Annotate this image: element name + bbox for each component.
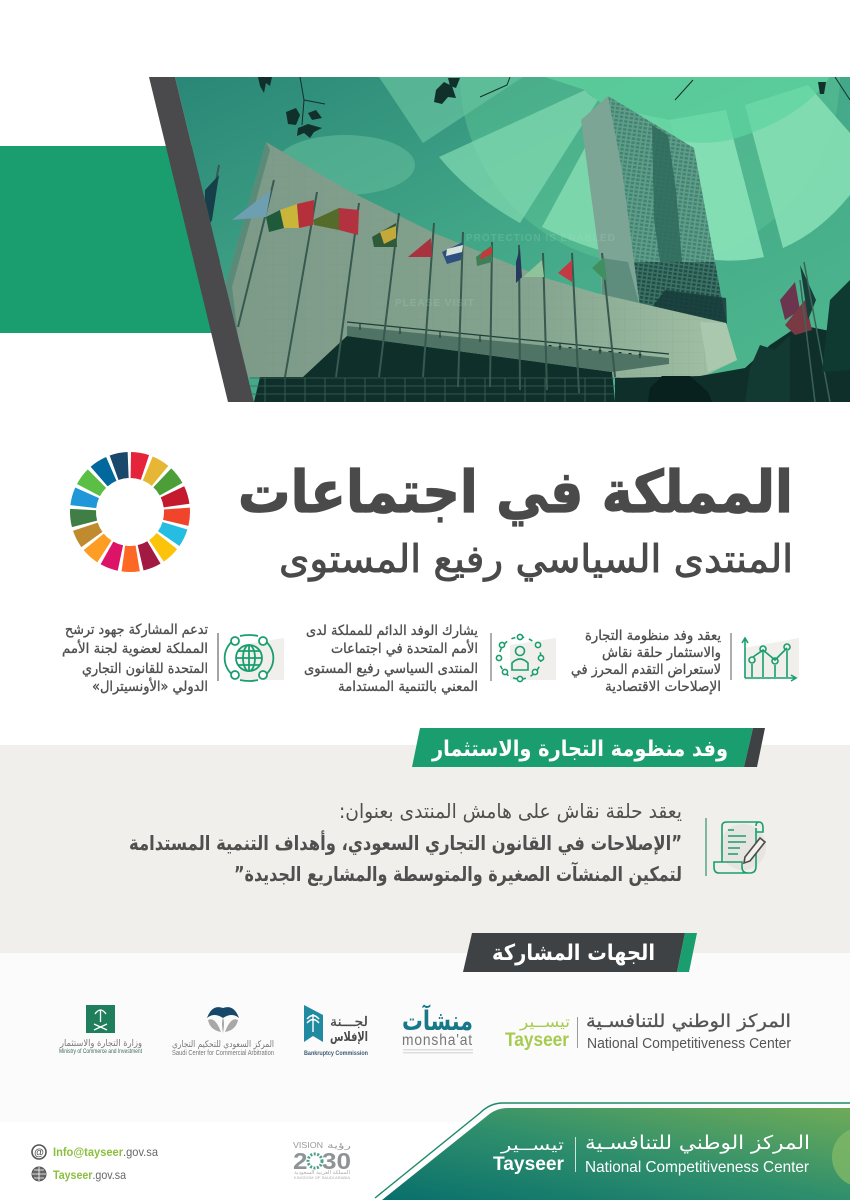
flag poles bbox=[205, 165, 615, 393]
text block: المملكة لعضوية لجنة الأمم bbox=[62, 639, 208, 657]
tree branches bbox=[258, 77, 850, 138]
icon: line chart bbox=[731, 633, 799, 681]
logo: National Competitiveness Center: المركز الوطني للتنافسـية bbox=[586, 1011, 791, 1032]
logo: National Competitiveness Center: تيســير bbox=[519, 1013, 570, 1031]
column: trade delegation bbox=[571, 628, 799, 695]
text block bbox=[62, 622, 208, 695]
logo: Saudi Center for Commercial Arbitration: Saudi Center for Commercial Arbitration bbox=[172, 1050, 274, 1057]
photo watermark: PLEASE VISIT bbox=[395, 298, 475, 309]
lower near-white band bbox=[0, 953, 850, 1122]
logo: Vision 2030: المملكة العربية السعودية bbox=[294, 1170, 350, 1176]
panel: trade delegation band bbox=[0, 728, 850, 953]
text block: الدولي «الأونسيترال» bbox=[92, 677, 208, 695]
logo: Bankruptcy Commission bbox=[304, 1005, 368, 1057]
ribbon: participating entities bbox=[463, 933, 697, 972]
logo: Vision 2030 bbox=[293, 1141, 351, 1180]
text block bbox=[304, 623, 478, 695]
text: panel discussion title: لتمكين المنشآت الصغيرة والمتوسطة والمشاريع الجديدة” bbox=[234, 861, 682, 886]
subtitle: المنتدى السياسي رفيع المستوى bbox=[279, 537, 793, 582]
logo: Vision 2030: KINGDOM OF SAUDI ARABIA bbox=[294, 1175, 350, 1180]
SDG colour wheel bbox=[64, 446, 196, 578]
footer Tayseer wordmark bbox=[493, 1132, 810, 1176]
text: panel discussion title: ”الإصلاحات في القانون التجاري السعودي، وأهداف التنمية المستدامة bbox=[129, 829, 682, 856]
text block: تدعم المشاركة جهود ترشح bbox=[65, 622, 208, 638]
logo: National Competitiveness Center: National Competitiveness Center bbox=[587, 1035, 791, 1052]
text block: لاستعراض التقدم المحرز في bbox=[571, 662, 721, 678]
logo: National Competitiveness Center: Tayseer bbox=[505, 1030, 570, 1051]
text block: والاستثمار حلقة نقاش bbox=[602, 645, 721, 661]
logo: Ministry of Commerce and Investment: Ministry of Commerce and Investment bbox=[59, 1048, 142, 1055]
logo: Ministry of Commerce and Investment: وزارة التجارة والاستثمار bbox=[59, 1039, 142, 1049]
footer green panel bbox=[375, 1103, 850, 1200]
text block: الإصلاحات الاقتصادية bbox=[605, 679, 721, 695]
logo: National Competitiveness Center bbox=[505, 1011, 791, 1052]
wheel overlay wedges bbox=[282, 77, 850, 261]
footer contact: email: @ bbox=[34, 1148, 44, 1158]
logo: Bankruptcy Commission: لجـــنة bbox=[330, 1015, 368, 1030]
canopy and entrance shadow bbox=[254, 322, 669, 402]
text block: المعني بالتنمية المستدامة bbox=[338, 679, 478, 695]
column: UNCITRAL candidacy bbox=[62, 622, 284, 695]
logo: Bankruptcy Commission: الإفلاس bbox=[330, 1030, 368, 1045]
flags bbox=[204, 175, 607, 283]
photo watermark: PROTECTION IS ENABLED bbox=[466, 233, 616, 244]
footer contact: website bbox=[32, 1167, 126, 1182]
logo: Monsha'at: monsha'at bbox=[402, 1032, 473, 1049]
fence bbox=[250, 378, 620, 402]
ribbon: delegation heading bbox=[412, 728, 765, 767]
footer Tayseer wordmark: Tayseer bbox=[493, 1154, 565, 1175]
footer contact: website: Tayseer.gov.sa bbox=[53, 1168, 126, 1182]
text block: الأمم المتحدة في اجتماعات bbox=[331, 639, 478, 657]
logo: Bankruptcy Commission: Bankruptcy Commission bbox=[304, 1051, 368, 1057]
logo: Monsha'at bbox=[402, 1004, 473, 1054]
footer contact: email: Info@tayseer.gov.sa bbox=[53, 1145, 158, 1159]
assembly hall wall bbox=[225, 142, 737, 378]
logo: Ministry of Commerce and Investment bbox=[59, 1005, 142, 1055]
logo: Vision 2030: 2030 bbox=[293, 1148, 351, 1174]
photo watermark bbox=[395, 233, 616, 309]
footer Tayseer wordmark: المركز الوطني للتنافسـية bbox=[585, 1132, 810, 1154]
dark slanted strip bbox=[149, 77, 254, 402]
text block: المنتدى السياسي رفيع المستوى bbox=[304, 661, 478, 677]
column: permanent delegation bbox=[304, 623, 556, 695]
text block bbox=[571, 628, 721, 695]
logo: Monsha'at: منشآت bbox=[402, 1004, 473, 1037]
hero photo: UN headquarters bbox=[175, 77, 850, 402]
title: المملكة في اجتماعات bbox=[238, 458, 793, 526]
text block: المتحدة للقانون التجاري bbox=[82, 661, 208, 677]
logo: Saudi Center for Commercial Arbitration bbox=[172, 1007, 274, 1057]
ribbon: delegation heading: وفد منظومة التجارة والاستثمار bbox=[431, 737, 728, 762]
icon: globe network bbox=[218, 633, 284, 681]
secretariat tower bbox=[581, 96, 727, 324]
ground, cars and right side trees bbox=[615, 325, 850, 402]
logo: Saudi Center for Commercial Arbitration: المركز السعودي للتحكيم التجاري bbox=[172, 1040, 274, 1050]
green band behind photo bbox=[0, 146, 220, 333]
logo: Vision 2030: رؤية bbox=[327, 1141, 351, 1150]
footer Tayseer wordmark: National Competitiveness Center bbox=[585, 1159, 810, 1176]
text block: يشارك الوفد الدائم للمملكة لدى bbox=[306, 623, 478, 639]
text block: يعقد وفد منظومة التجارة bbox=[585, 628, 721, 644]
icon: person network bbox=[491, 633, 556, 682]
text: panel discussion title: يعقد حلقة نقاش على هامش المنتدى بعنوان: bbox=[339, 799, 682, 823]
text: panel discussion title bbox=[129, 799, 682, 886]
logo: Vision 2030: VISION bbox=[293, 1141, 323, 1150]
footer Tayseer wordmark: تيســير bbox=[500, 1136, 564, 1154]
icon: scroll and pen bbox=[706, 818, 766, 876]
right flag cluster bbox=[780, 262, 850, 402]
ribbon: participating entities: الجهات المشاركة bbox=[492, 941, 655, 966]
